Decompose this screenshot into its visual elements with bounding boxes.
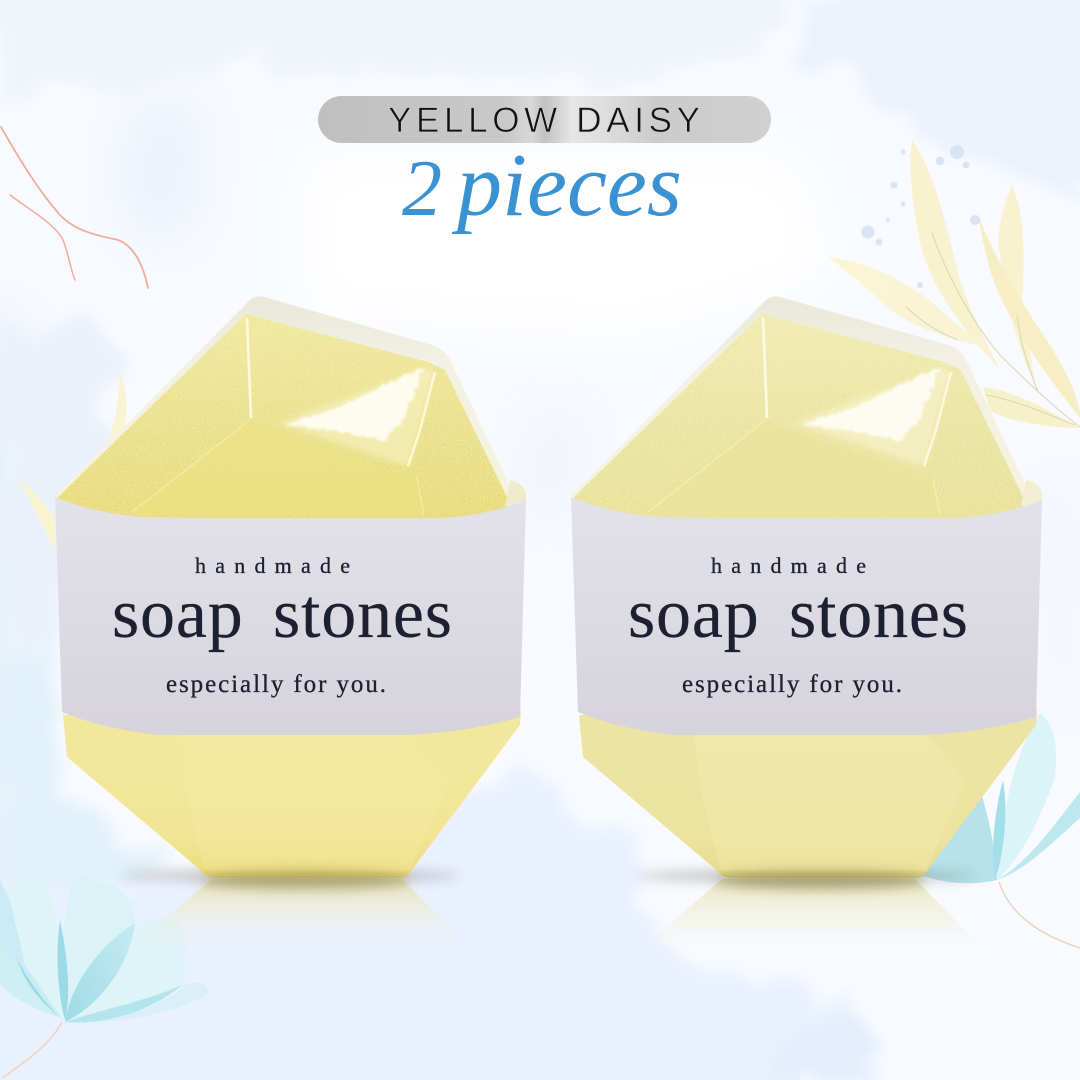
glossy highlight (801, 368, 940, 442)
soap upper rim (55, 296, 512, 510)
label text: handmade (195, 553, 350, 578)
band back tab (505, 480, 526, 506)
flower: bottom left (0, 871, 208, 1078)
flower: right behind soap (920, 713, 1080, 948)
base shadow on soap (716, 871, 926, 889)
gloss area (794, 368, 950, 466)
facet: centre lower (646, 420, 941, 515)
facet line (763, 318, 767, 418)
highlight edge (408, 372, 435, 466)
paper band (55, 497, 526, 735)
soap upper body (58, 314, 507, 525)
grain texture (58, 314, 507, 525)
product: left soap stone (55, 296, 526, 889)
title pill: yellow daisy (318, 96, 771, 143)
base shadow on soap (200, 871, 410, 889)
grain texture (574, 314, 1023, 525)
highlight edge (924, 372, 951, 466)
decoration: blue paint splatter (862, 145, 980, 288)
ground shadow (120, 870, 460, 882)
facet line (648, 420, 940, 515)
facet: centre lower (130, 420, 425, 515)
ground shadow (636, 870, 976, 882)
heading: 2 pieces: 2 (402, 145, 442, 233)
label title: soap (112, 576, 244, 653)
label tagline: especially for you. (166, 671, 386, 698)
label tagline: especially for you. (682, 671, 902, 698)
facet line (132, 420, 424, 515)
soap lower part (579, 710, 1037, 878)
title pill: yellow daisy: YELLOW DAISY (388, 101, 700, 140)
label title: soap (628, 576, 760, 653)
decoration: orange twigs (1, 127, 148, 288)
product: right soap stone (571, 296, 1042, 889)
label title: stones (273, 576, 453, 653)
facet line (247, 318, 251, 418)
heading: 2 pieces: pieces (451, 136, 682, 235)
soap upper body (574, 314, 1023, 525)
lower facet (178, 735, 450, 870)
soap upper rim (571, 296, 1028, 510)
reflection: right soap (640, 879, 985, 950)
band back tab (1021, 480, 1042, 506)
decoration: yellow leaves behind left soap (18, 370, 126, 550)
gloss area (278, 368, 434, 466)
decoration: yellow leaves right (828, 140, 1080, 428)
label title: stones (789, 576, 969, 653)
glossy highlight (285, 368, 424, 442)
soap lower part (63, 710, 521, 878)
paper band (571, 497, 1042, 735)
reflection: left soap (130, 879, 470, 948)
lower facet (694, 735, 966, 870)
label text: handmade (711, 553, 866, 578)
